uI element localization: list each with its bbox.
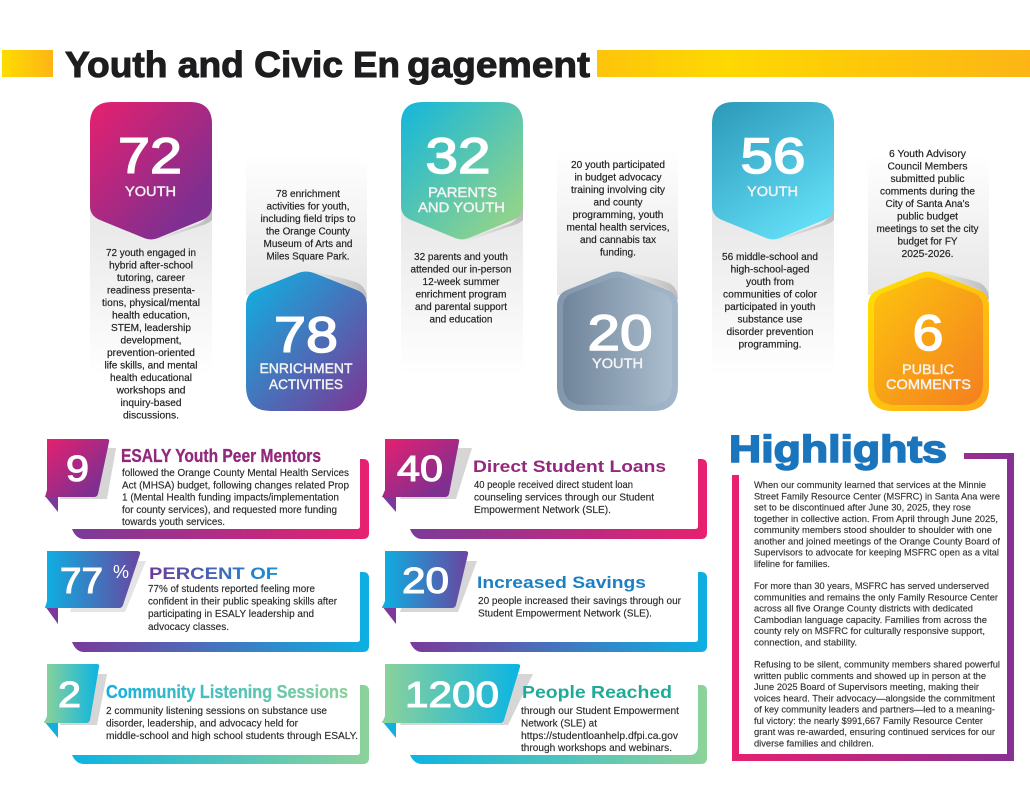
text: 6 public comments description — [876, 149, 979, 260]
panel: highlights — [729, 429, 1014, 761]
text: 78 enrichment description: activities for youth, — [266, 202, 350, 212]
text: 72 youth description: workshops and — [116, 386, 186, 396]
text: Act (MHSA) budget, following changes related Prop — [122, 480, 349, 492]
title bar: right accent — [597, 50, 1030, 77]
card: 20 youth — [557, 150, 678, 411]
title: gagement — [407, 44, 590, 85]
number: 6: 6 — [912, 305, 944, 361]
text: 32 parents description: enrichment program — [416, 290, 506, 300]
text: 78 enrichment description: 78 enrichment — [276, 189, 340, 200]
card: 56 youth — [712, 102, 834, 375]
label: youth: YOUTH — [125, 184, 176, 199]
highlights text: ful victory: the nearly $991,667 Family Resource Center — [754, 716, 983, 727]
highlights text: Street Family Resource Center (MSFRC) in Santa Ana were — [754, 491, 1000, 502]
label: youth: YOUTH — [592, 356, 643, 371]
number: 1200: 1200 — [405, 674, 499, 715]
text: 78 enrichment description: Miles Square Park. — [266, 252, 350, 262]
title: Youth and Civic — [65, 44, 343, 85]
highlights text: community members stood shoulder to shoulder with one — [754, 525, 992, 536]
number: 56: 56 — [740, 128, 806, 184]
percent sign: % — [113, 562, 129, 582]
highlights text: another and joined meetings of the Orange County Board of — [754, 536, 1000, 547]
number: 78: 78 — [274, 307, 338, 363]
highlights text: set to be discontinued after June 30, 2025, they rose — [754, 502, 971, 514]
text: 20 youth description — [566, 160, 670, 258]
highlights text: Supervisors to advocate for keeping MSFRC open as a vital — [754, 548, 999, 558]
text: towards youth services. — [122, 517, 225, 528]
text: 72 youth description: hybrid after-school — [109, 260, 193, 272]
text: 32 parents description: 12-week summer — [422, 277, 500, 288]
text: 72 youth description: STEM, leadership — [111, 323, 191, 334]
heading: People Reached — [522, 682, 672, 702]
text: https://studentloanhelp.dfpi.ca.gov — [521, 731, 679, 742]
tag: 20 — [382, 551, 468, 608]
text: confident in their public speaking skills after — [148, 596, 338, 608]
label: public comments: PUBLIC — [902, 362, 954, 377]
text: 78 enrichment description: including field trips to — [260, 214, 356, 225]
tag: 9 — [45, 439, 109, 497]
text: 72 youth description: 72 youth engaged in — [106, 248, 196, 259]
text: 20 youth description: and cannabis tax — [580, 235, 657, 246]
text: 56 youth description: youth from — [746, 277, 794, 288]
heading: Community Listening Sessions — [106, 681, 348, 702]
text: 72 youth description: inquiry-based — [120, 398, 182, 409]
text: 6 public comments description: public budget — [897, 212, 958, 222]
badge: 32 parents and youth — [401, 102, 523, 240]
text: 72 youth description: tutoring, career — [117, 273, 186, 284]
highlights frame — [732, 453, 1014, 761]
panel: 20 increased savings — [382, 551, 707, 652]
text: 56 youth description — [722, 252, 818, 350]
text: 6 public comments description: 2025-2026. — [902, 249, 954, 260]
label: enrichment activities — [260, 361, 352, 392]
text: 78 enrichment description: Museum of Arts and — [264, 239, 353, 250]
panel: 9 ESALY youth peer mentors — [45, 439, 369, 539]
text: 20 youth description: funding. — [600, 248, 636, 258]
highlights text: Cambodian language capacity. Families from across the — [754, 615, 987, 626]
heading: Increased Savings — [477, 573, 646, 592]
highlights text: When our community learned that services at the Minnie — [754, 480, 986, 491]
highlights text: across all five Orange County districts with dedicated — [754, 604, 973, 614]
text: 2 community listening sessions on substance use — [106, 706, 327, 717]
text: 72 youth description: readiness presenta- — [107, 286, 195, 296]
text: 78 enrichment description — [260, 189, 356, 262]
text: 56 youth description: participated in youth — [724, 302, 816, 313]
text: 32 parents description — [410, 252, 512, 326]
highlights text — [753, 480, 1000, 749]
highlights text: written public comments and showed up in person at the — [753, 671, 986, 682]
badge: 6 public comments — [868, 272, 989, 411]
text: followed the Orange County Mental Health Services — [122, 468, 349, 479]
highlights text: voices heard. Their advocacy—alongside the commitment — [754, 693, 995, 704]
card: 6 public comments — [868, 149, 989, 411]
number: 20: 20 — [588, 305, 652, 361]
text: 40 people received direct student loan — [474, 480, 633, 491]
card: 72 youth — [90, 102, 212, 422]
text: 32 parents description: and education — [430, 314, 493, 326]
heading: PERCENT OF — [149, 564, 278, 583]
highlights text: of key community leaders and partners—led to a meaning- — [754, 704, 995, 716]
text: 20 youth description: programming, youth — [572, 210, 664, 221]
text: 72 youth description: development, — [120, 336, 182, 346]
text: 56 youth description: 56 middle-school and — [722, 252, 818, 263]
tag: 77 percent — [45, 551, 140, 608]
text: Network (SLE) at — [521, 718, 597, 730]
text: disorder, leadership, and advocacy held for — [106, 718, 299, 730]
text — [122, 468, 349, 528]
text: 20 youth description: training involving city — [571, 185, 666, 196]
text: advocacy classes. — [148, 622, 229, 633]
highlights text: grant was re-awarded, ensuring continued services for our — [754, 727, 995, 738]
text: 72 youth description: health educational — [110, 373, 192, 384]
text: 6 public comments description: Council Members — [888, 162, 968, 172]
text: 20 youth description: and county — [594, 198, 643, 208]
text: 6 public comments description: submitted public — [890, 174, 964, 185]
text: 20 people increased their savings through our — [478, 596, 682, 607]
text — [474, 480, 654, 516]
highlights text: together in collective action. From April through June 2025, — [754, 514, 998, 525]
number: 77: 77 — [60, 560, 103, 601]
heading: Direct Student Loans — [473, 457, 666, 476]
highlights text: lifeline for families. — [754, 559, 830, 570]
label: enrichment activities: ENRICHMENT — [260, 361, 352, 376]
badge: 56 youth — [712, 102, 834, 240]
tag: 1200 — [382, 664, 520, 723]
title — [65, 44, 590, 85]
text — [521, 706, 679, 754]
badge: 20 youth — [557, 272, 678, 411]
badge: 78 enrichment activities — [246, 272, 367, 411]
highlights text: diverse families and children. — [754, 738, 874, 749]
badge: 72 youth — [90, 102, 212, 240]
label: public comments: COMMENTS — [886, 377, 971, 392]
text: for county services), and requested more funding — [122, 505, 337, 516]
label: parents and youth — [418, 185, 505, 215]
text: 32 parents description: attended our in-person — [410, 264, 512, 276]
panel: 77 percent — [45, 551, 369, 652]
card: 78 enrichment activities — [246, 155, 367, 411]
tag: 40 — [382, 439, 459, 497]
text: 72 youth description: tions, physical/mental — [102, 298, 200, 309]
text: 6 public comments description: comments during the — [880, 186, 975, 198]
text: 72 youth description: prevention-oriented — [107, 348, 195, 359]
card: 32 parents and youth — [401, 102, 523, 375]
heading: ESALY Youth Peer Mentors — [121, 446, 321, 466]
text: 20 youth description: 20 youth participated — [571, 160, 665, 171]
number: 40: 40 — [397, 448, 443, 489]
text: 6 public comments description: meetings to set the city — [876, 224, 979, 235]
text: 20 youth description: mental health services, — [566, 222, 670, 234]
tag: 2 — [44, 664, 99, 723]
label: parents and youth: PARENTS — [428, 185, 497, 200]
text: 6 public comments description: budget for FY — [898, 236, 958, 248]
text: through workshops and webinars. — [521, 743, 672, 754]
text: 6 public comments description: 6 Youth Advisory — [889, 149, 967, 160]
text: Empowerment Network (SLE). — [474, 505, 611, 516]
text: 56 youth description: communities of color — [723, 290, 818, 300]
label: enrichment activities: ACTIVITIES — [269, 377, 343, 392]
text — [148, 584, 338, 633]
highlights text: Refusing to be silent, community members shared powerful — [754, 660, 1000, 670]
text: through our Student Empowerment — [521, 706, 679, 717]
text: 72 youth description: health education, — [112, 310, 190, 322]
highlights text: connection, and stability. — [754, 637, 857, 648]
text — [478, 596, 682, 620]
label: youth: YOUTH — [747, 184, 798, 199]
highlights heading: Highlights — [729, 429, 947, 471]
number: 2: 2 — [58, 674, 81, 715]
highlights text: For more than 30 years, MSFRC has served underserved — [754, 581, 989, 592]
text: 20 youth description: in budget advocacy — [574, 172, 662, 184]
highlights text: communities and remains the only Family Resource Center — [754, 592, 998, 603]
number: 32: 32 — [426, 128, 490, 184]
highlights text: June 2025 Board of Supervisors meeting, making their — [754, 682, 979, 693]
text: Student Empowerment Network (SLE). — [478, 608, 652, 620]
title bar: left accent — [2, 50, 53, 77]
number: 20: 20 — [402, 560, 449, 601]
panel: 40 direct student loans — [382, 439, 707, 539]
text: 72 youth description: discussions. — [123, 410, 179, 422]
highlights text: county rely on MSFRC for culturally responsive support, — [754, 626, 985, 637]
label: public comments — [886, 362, 971, 392]
text: 1 (Mental Health funding impacts/implementation — [122, 492, 339, 504]
text: 6 public comments description: City of Santa Ana's — [886, 199, 970, 210]
text: 56 youth description: programming. — [738, 340, 802, 350]
panel: 2 community listening sessions — [44, 664, 369, 764]
text: participating in ESALY leadership and — [148, 609, 314, 620]
text: 32 parents description: 32 parents and youth — [414, 252, 508, 263]
text: 78 enrichment description: the Orange County — [266, 226, 351, 238]
text: 32 parents description: and parental support — [415, 302, 507, 313]
number: 72: 72 — [118, 128, 182, 184]
text: 56 youth description: substance use — [738, 314, 803, 326]
text: 77% of students reported feeling more — [148, 584, 315, 595]
label: parents and youth: AND YOUTH — [418, 200, 505, 215]
number: 9: 9 — [66, 448, 89, 489]
text: 72 youth description — [102, 248, 200, 422]
text: 72 youth description: life skills, and mental — [104, 360, 198, 372]
text: middle-school and high school students through ESALY. — [106, 731, 358, 742]
title: En — [353, 44, 400, 85]
panel: 1200 people reached — [382, 664, 707, 764]
text: 56 youth description: disorder prevention — [726, 327, 814, 338]
text: 56 youth description: high-school-aged — [730, 264, 810, 276]
text: counseling services through our Student — [474, 492, 654, 504]
text — [106, 706, 358, 742]
